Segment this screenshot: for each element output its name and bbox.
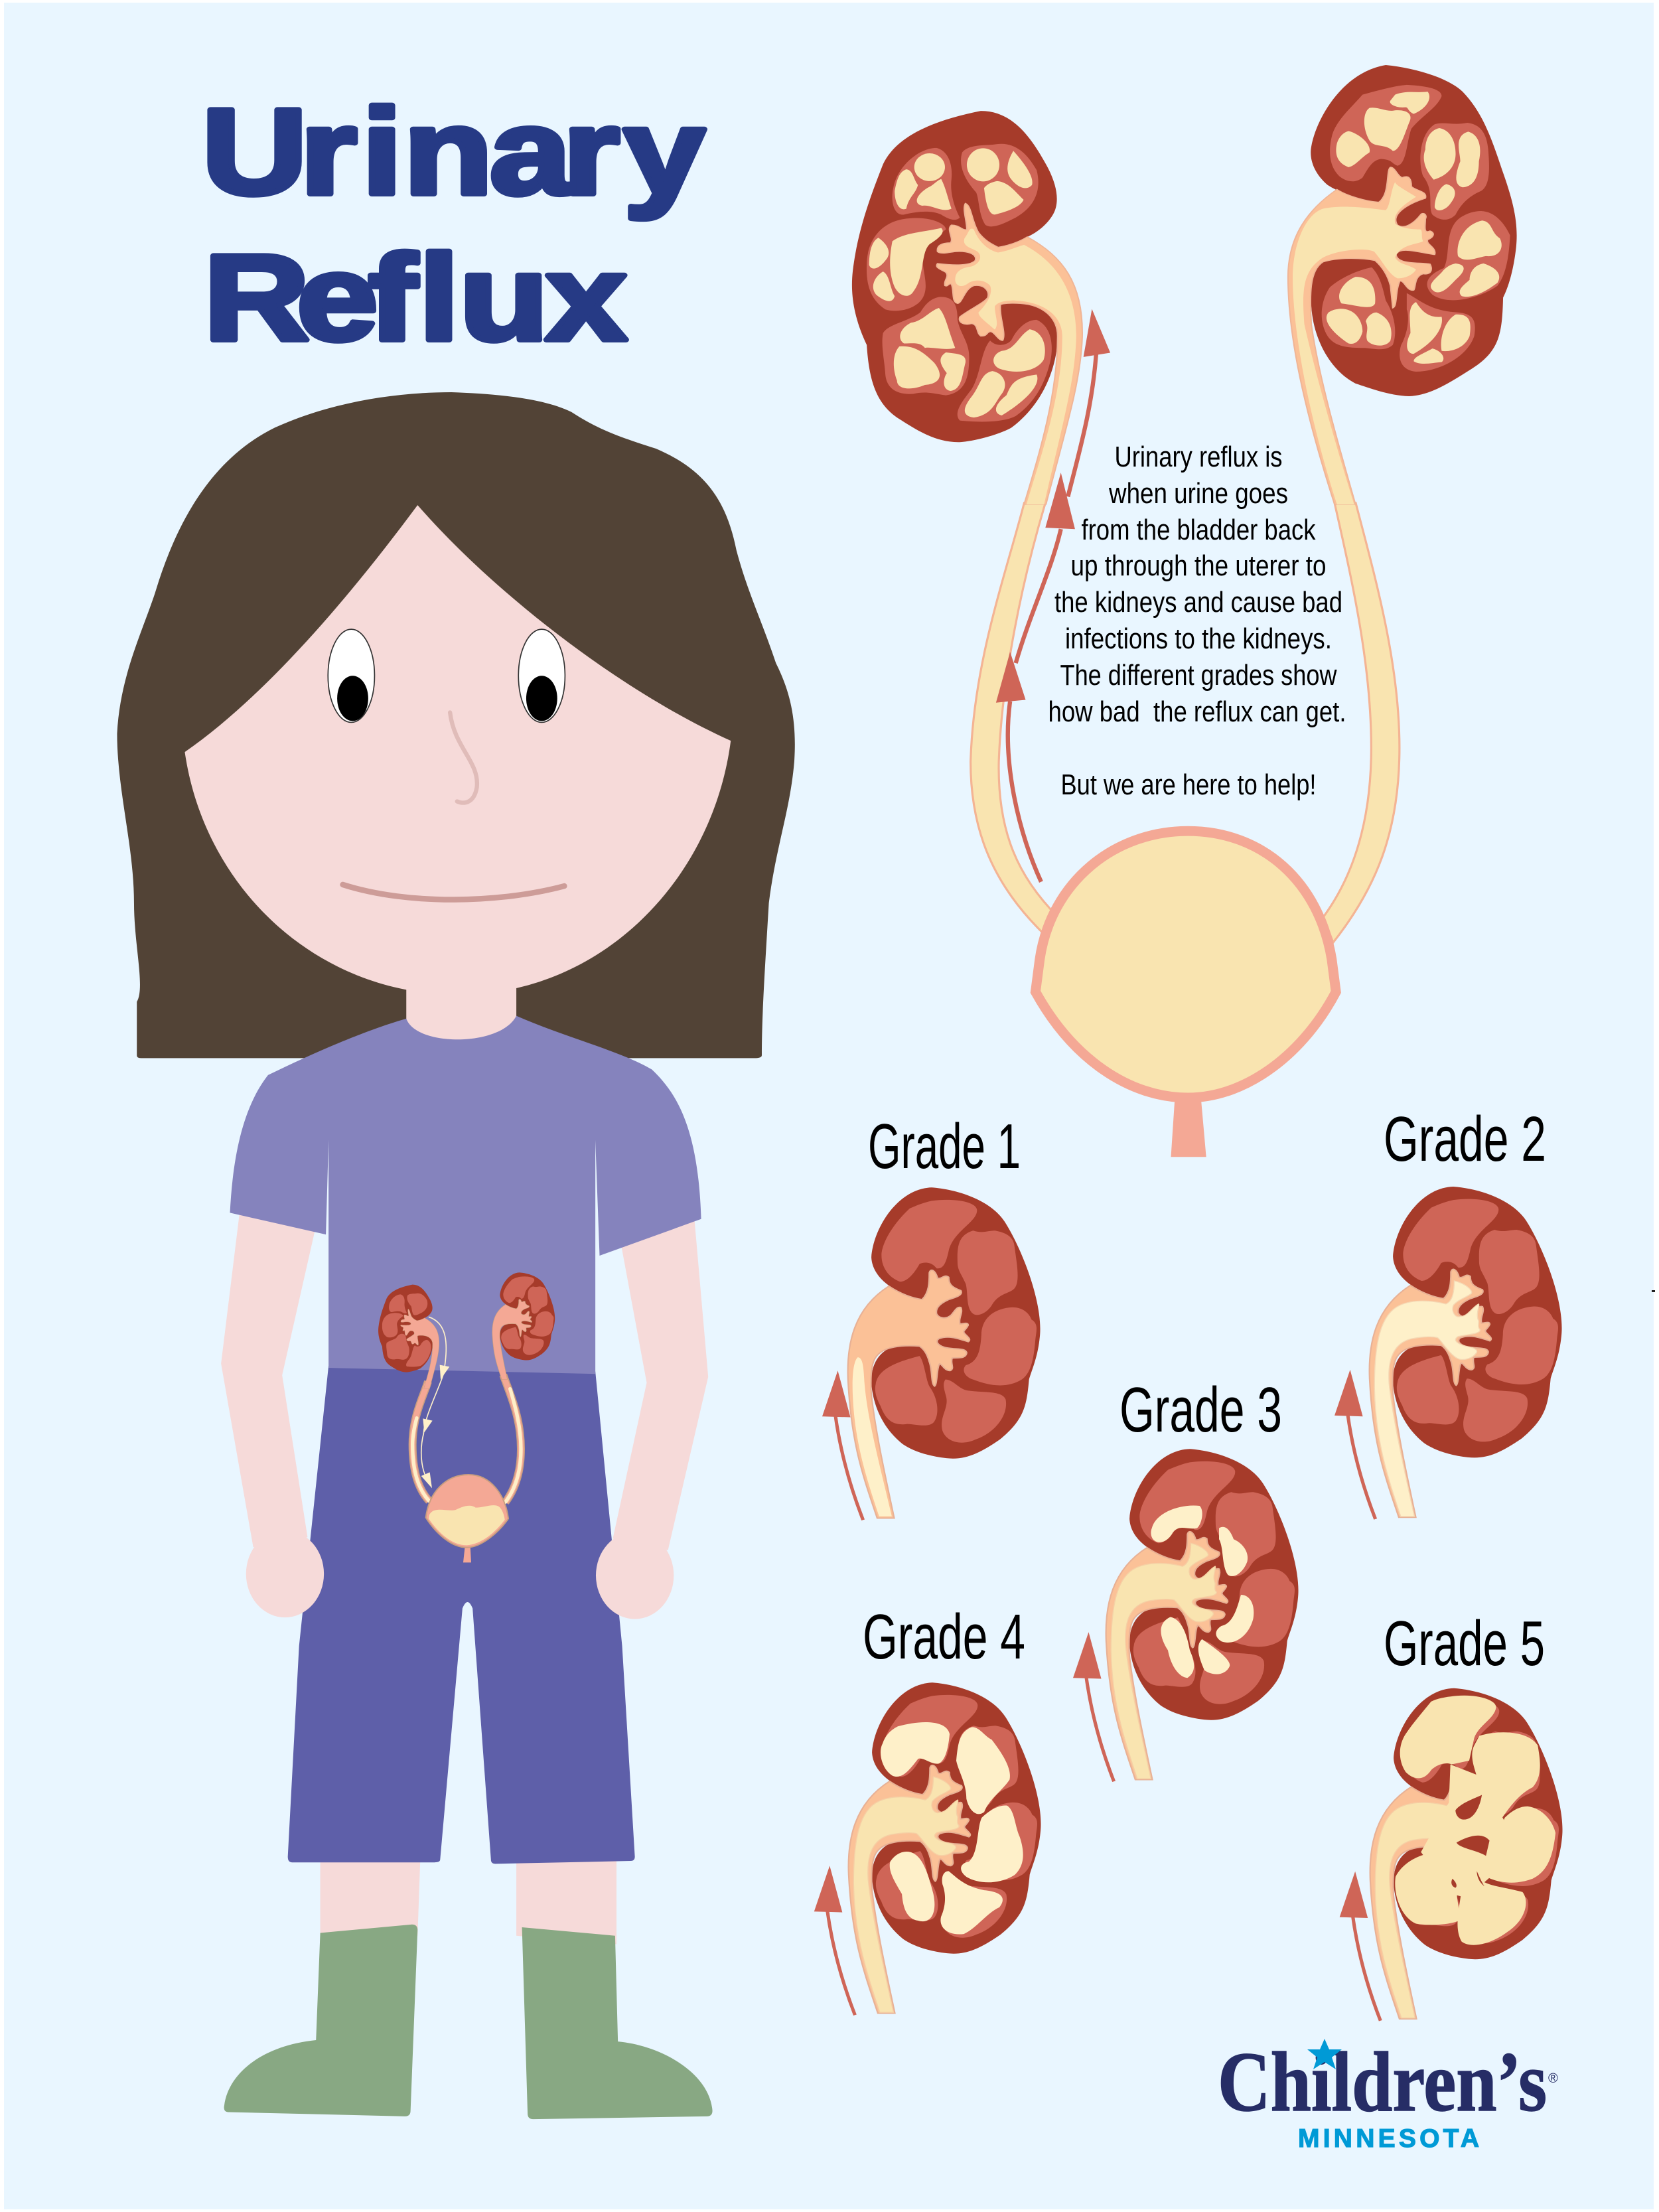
explanation text: the kidneys and cause bad <box>1054 586 1342 619</box>
nose <box>450 713 477 803</box>
main urinary system <box>852 65 1517 1157</box>
title: Urinary <box>202 84 705 220</box>
right renal pelvis <box>1288 167 1435 504</box>
explanation text: when urine goes <box>1108 477 1288 510</box>
left renal pelvis <box>936 203 1082 504</box>
grade 4 kidney <box>814 1682 1041 2015</box>
grade 3 kidney <box>1073 1449 1299 1781</box>
girl illustration <box>117 392 795 2119</box>
small right kidney <box>492 1272 555 1380</box>
left boot <box>224 1925 417 2116</box>
grade 4 heading: Grade 4 <box>863 1601 1025 1672</box>
grade 3 heading: Grade 3 <box>1119 1374 1282 1445</box>
face <box>184 505 731 995</box>
red reflux arrows <box>996 309 1110 882</box>
main ureters <box>971 503 1400 942</box>
main bladder <box>1035 831 1336 1157</box>
shorts <box>288 1366 635 1864</box>
small urinary system on the body <box>378 1272 555 1562</box>
explanation text: from the bladder back <box>1082 514 1316 546</box>
small cream arrows <box>421 1317 449 1488</box>
small bladder <box>426 1475 508 1562</box>
registered mark: ® <box>1548 2071 1558 2086</box>
small edge mark <box>1652 1290 1655 1292</box>
title <box>202 84 705 366</box>
explanation text: how bad the reflux can get. <box>1048 696 1346 728</box>
right boot <box>522 1927 713 2119</box>
grade 5 heading: Grade 5 <box>1384 1608 1545 1679</box>
grade 5 kidney <box>1340 1688 1563 2021</box>
shirt <box>230 1016 701 1374</box>
left arm <box>221 1199 324 1617</box>
grade 1 kidney <box>822 1187 1041 1520</box>
legs <box>321 1856 616 1944</box>
right eye <box>518 629 565 722</box>
right arm <box>596 1199 708 1619</box>
small ureters <box>413 1375 521 1502</box>
mouth <box>343 885 564 900</box>
main left kidney <box>852 111 1082 504</box>
explanation text: The different grades show <box>1060 659 1337 692</box>
grade 1 heading: Grade 1 <box>868 1111 1021 1182</box>
explanation text: But we are here to help! <box>1060 769 1317 801</box>
explanation text: infections to the kidneys. <box>1065 623 1332 655</box>
grade 2 kidney <box>1334 1187 1562 1519</box>
main right kidney <box>1288 65 1517 504</box>
subtitle: MINNESOTA <box>1298 2124 1479 2153</box>
neck <box>406 974 516 1051</box>
Children's Minnesota logo <box>1218 2035 1558 2153</box>
star icon <box>1307 2039 1342 2069</box>
title: Reflux <box>204 230 627 366</box>
grade 2 heading: Grade 2 <box>1384 1104 1546 1175</box>
explanation text: up through the uterer to <box>1071 550 1326 582</box>
explanation text <box>1048 441 1346 801</box>
hair <box>117 392 795 1058</box>
small left kidney <box>378 1285 439 1388</box>
wordmark: Children’s <box>1218 2035 1547 2129</box>
left eye <box>328 629 374 722</box>
explanation text: Urinary reflux is <box>1115 441 1282 473</box>
